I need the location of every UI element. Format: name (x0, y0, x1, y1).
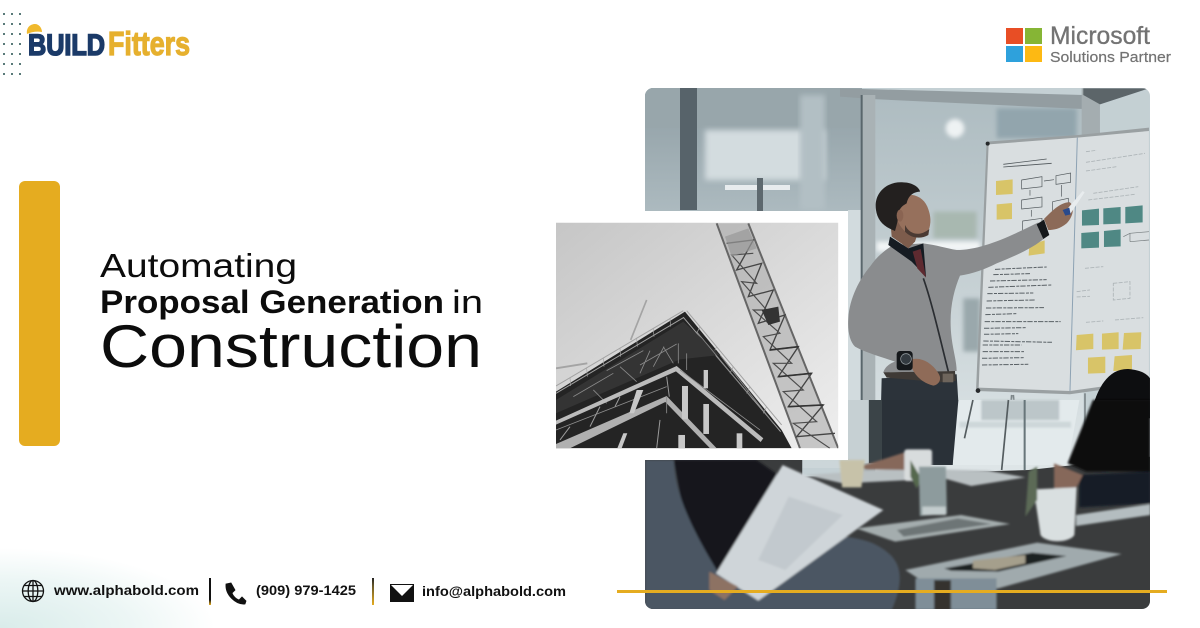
columns (617, 370, 742, 448)
sticky notes (996, 179, 1141, 374)
icon: phone (226, 583, 246, 604)
contact: website (22, 580, 199, 602)
title: in (452, 284, 483, 320)
Microsoft Solutions Partner logo: Microsoft (1050, 22, 1150, 50)
whiteboard easel legs (1010, 393, 1086, 424)
decorative dot grid and BuildFitters logo: BUILD (28, 29, 105, 62)
title: Automating (100, 247, 297, 284)
icon: globe (22, 580, 44, 602)
title: Proposal Generation (100, 284, 444, 320)
gold rule across photo (617, 590, 1167, 593)
inset: white frame with construction photo (540, 211, 848, 460)
decorative dot grid and BuildFitters logo: Fitters (108, 25, 190, 62)
beige drink glass (839, 460, 865, 487)
icon: envelope (390, 584, 414, 602)
ear (897, 210, 903, 222)
marker (1068, 191, 1084, 214)
table surface (645, 457, 1150, 610)
crane tower (717, 223, 838, 448)
sleeve cuff and hand (1037, 220, 1049, 239)
Microsoft Solutions Partner logo: Solutions Partner (1050, 50, 1171, 66)
tablet and phone, front (905, 543, 1122, 588)
belt (883, 371, 956, 382)
window frame (840, 88, 1083, 109)
contact: phone: (909) 979-1425 (256, 582, 356, 598)
seated person head, foreground right (1090, 369, 1150, 418)
left office window (645, 88, 862, 400)
flowchart and handwriting (1003, 159, 1071, 230)
decorative dot grid and BuildFitters logo (3, 13, 190, 75)
trousers lower section (882, 400, 958, 465)
shirt and tie (888, 237, 926, 277)
books below table edge (915, 578, 997, 610)
floor slabs (556, 366, 763, 442)
foreground meeting table (645, 400, 1150, 610)
contact: website: www.alphabold.com (53, 582, 199, 598)
seated person, foreground left (645, 460, 900, 610)
document held by seated person (716, 465, 883, 601)
whiteboard (976, 128, 1149, 394)
building (556, 311, 792, 448)
contact: phone (226, 582, 356, 604)
bright window beyond table (953, 400, 1079, 465)
railing lines (560, 377, 669, 448)
title: Construction (100, 313, 482, 380)
title (100, 247, 483, 380)
yellow accent bar (19, 181, 60, 446)
hand on hip and watch (910, 359, 940, 386)
divider (372, 578, 374, 605)
middle window (873, 98, 1083, 475)
trousers (881, 374, 965, 465)
presenter (848, 182, 1085, 465)
laptops and pads on table (806, 468, 1025, 486)
neck and face (891, 221, 916, 248)
right person sleeve and mug (1068, 400, 1150, 472)
Microsoft Solutions Partner logo (1006, 22, 1171, 66)
underside beams and scaffolding (556, 322, 720, 413)
photo: presenter at whiteboard in meeting room (645, 88, 1150, 610)
contact: email: info@alphabold.com (422, 583, 566, 599)
sweater (848, 222, 1045, 372)
divider (209, 578, 211, 605)
water glass (919, 467, 947, 516)
distant crane (556, 300, 647, 368)
contact: email (390, 583, 566, 602)
hair (876, 182, 920, 231)
roof rails (556, 311, 782, 432)
white mug with plant (904, 449, 932, 481)
tablet on table (856, 515, 1010, 542)
